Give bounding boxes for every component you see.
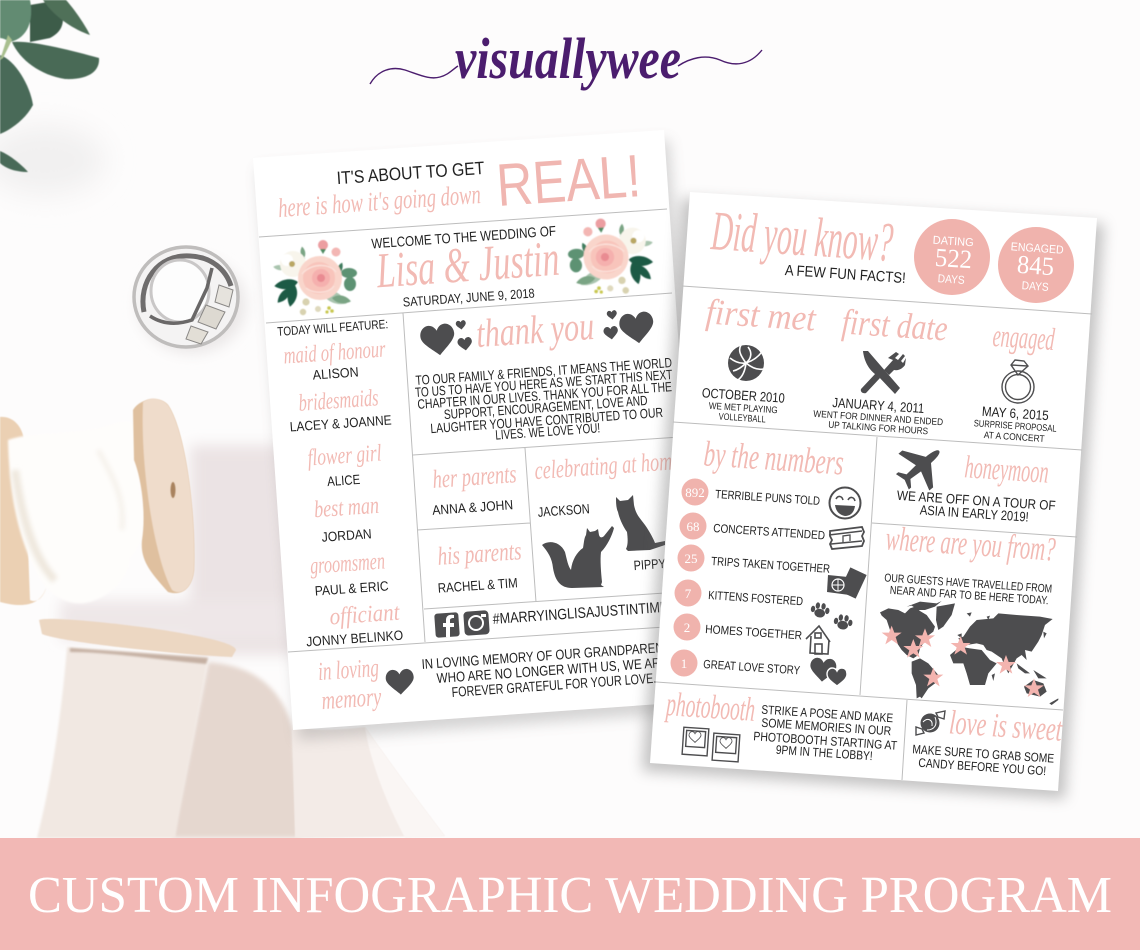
stat: engaged 845 days	[998, 227, 1074, 303]
stat: dating 522 days: DAYS	[937, 273, 965, 287]
role: flower girl: ALICE	[327, 472, 361, 489]
timeline: first met: first met	[705, 291, 818, 339]
timeline: engaged: MAY 6, 2015	[981, 404, 1049, 423]
icon: hearts right	[603, 310, 656, 346]
icon: laughing emoji	[830, 488, 860, 518]
stat: 68 concerts attended	[680, 512, 826, 542]
panel: celebrating at home: celebrating at home	[534, 446, 681, 485]
panel: in loving memory: WHO ARE NO LONGER WITH US, WE ARE	[436, 654, 669, 686]
stat: 25 trips taken together: 25	[684, 551, 698, 566]
panel: in loving memory	[317, 638, 679, 715]
icon: cat pippy	[616, 495, 665, 551]
panel: photobooth: photobooth	[664, 686, 756, 729]
stat: 892 terrible puns told: TERRIBLE PUNS TOLD	[715, 487, 821, 508]
role: bridesmaids: bridesmaids	[298, 385, 379, 417]
stat: 1 great love story: GREAT LOVE STORY	[703, 657, 801, 677]
stat: 68 concerts attended: 68	[686, 519, 700, 534]
stat: 2 homes together	[674, 614, 803, 642]
icon: cat jackson	[542, 526, 614, 588]
icon: memorial heart	[385, 668, 415, 696]
role: best man: best man	[313, 493, 380, 523]
stat: 892 terrible puns told: 892	[685, 485, 705, 500]
timeline: engaged: AT A CONCERT	[983, 430, 1045, 445]
panel: her parents	[431, 459, 517, 518]
icon: airplane	[887, 433, 955, 500]
heading: it's about to get real: IT'S ABOUT TO GET	[336, 158, 485, 188]
stat: 68 concerts attended: CONCERTS ATTENDED	[713, 521, 826, 542]
stat: 7 kittens fostered: KITTENS FOSTERED	[708, 588, 804, 608]
timeline: first date	[813, 302, 949, 437]
heading: it's about to get real: REAL!	[494, 142, 643, 219]
stat: 2 homes together: HOMES TOGETHER	[705, 622, 803, 642]
role: maid of honour: ALISON	[312, 364, 359, 383]
white fabric	[8, 421, 143, 603]
logo: visuallywee	[370, 26, 762, 91]
panel: love is sweet: love is sweet	[948, 704, 1064, 749]
heading: it's about to get real: here is how it's going down	[277, 179, 482, 223]
role: maid of honour	[283, 336, 387, 383]
panel: honeymoon: ASIA IN EARLY 2019!	[919, 502, 1029, 525]
stat: dating 522 days	[914, 219, 990, 295]
right spool disc	[133, 399, 194, 593]
timeline: first met: VOLLEYBALL	[718, 411, 766, 426]
welcome block	[371, 223, 561, 310]
stat: 7 kittens fostered: 7	[685, 586, 692, 601]
role: bridesmaids: LACEY & JOANNE	[289, 412, 392, 435]
left spool disc	[0, 417, 46, 605]
panel: his parents	[436, 536, 522, 596]
stat: engaged 845 days: 845	[1016, 250, 1055, 281]
icon: facebook	[434, 612, 460, 638]
panel: where are you from: NEAR AND FAR TO BE HERE TODAY.	[889, 585, 1049, 607]
panel: honeymoon	[887, 433, 1056, 525]
timeline: engaged	[973, 317, 1057, 445]
thank you message: TO OUR FAMILY & FRIENDS, IT MEANS THE WORLD	[415, 355, 673, 388]
welcome block: Lisa & Justin	[374, 230, 561, 298]
stat: 1 great love story	[670, 650, 801, 677]
role: maid of honour: maid of honour	[283, 336, 387, 370]
second spool	[37, 619, 236, 838]
role: bridesmaids	[289, 385, 392, 435]
stat: 25 trips taken together	[678, 544, 831, 576]
icon: left floral bouquet	[273, 240, 357, 315]
stat: 2 homes together: 2	[684, 620, 690, 635]
thank you message: LAUGHTER YOU HAVE CONTRIBUTED TO OUR	[430, 405, 664, 436]
stat: engaged 845 days: ENGAGED	[1010, 241, 1064, 257]
icon: concert tickets	[829, 527, 864, 549]
timeline: engaged: engaged	[992, 317, 1056, 357]
panel: love is sweet: MAKE SURE TO GRAB SOME	[912, 742, 1055, 766]
soft background shadows	[0, 125, 300, 655]
icon: right floral bouquet	[566, 215, 656, 297]
timeline: first met: WE MET PLAYING	[708, 401, 778, 416]
panel: in loving memory: in loving	[317, 653, 380, 686]
panel: left program sheet	[253, 130, 708, 740]
panel: where are you from	[880, 520, 1058, 705]
panel: photobooth: STRIKE A POSE AND MAKE	[761, 703, 894, 725]
role: groomsmen: groomsmen	[309, 548, 386, 580]
panel: photobooth: SOME MEMORIES IN OUR	[761, 716, 892, 738]
eucalyptus leaves	[0, 0, 99, 172]
icon: hearts left	[419, 320, 473, 358]
panel: photobooth: PHOTOBOOTH STARTING AT	[753, 729, 898, 753]
role: officiant: officiant	[329, 600, 401, 630]
panel: his parents: RACHEL & TIM	[437, 575, 518, 596]
world map with guest stars	[880, 601, 1058, 705]
banner	[0, 838, 1140, 950]
panel: by the numbers: by the numbers	[703, 433, 845, 483]
thank you message: SUPPORT, ENCOURAGEMENT, LOVE AND	[443, 393, 648, 422]
panel: her parents: her parents	[431, 459, 517, 494]
icon: wedding rings	[134, 247, 246, 353]
panel: thank you: thank you	[475, 303, 595, 356]
icon: passport	[827, 567, 867, 599]
logo: visuallywee: visuallywee	[455, 26, 681, 91]
panel: honeymoon: WE ARE OFF ON A TOUR OF	[896, 488, 1056, 513]
thank you message	[414, 355, 673, 443]
panel: by the numbers	[670, 433, 867, 686]
stat: 1 great love story: 1	[681, 656, 687, 671]
stat: 892 terrible puns told	[682, 478, 821, 508]
panel: today will feature: TODAY WILL FEATURE:	[277, 317, 389, 339]
timeline: first met: OCTOBER 2010	[701, 385, 785, 406]
panel: in loving memory: memory	[320, 682, 383, 715]
panel: love is sweet	[912, 704, 1064, 778]
icon: house	[806, 626, 830, 654]
stat: dating 522 days: DATING	[932, 235, 974, 249]
panel: thank you	[414, 303, 673, 443]
icon: paw prints	[810, 601, 853, 631]
icon: knife and fork	[861, 351, 906, 394]
timeline: engaged: SURPRISE PROPOSAL	[973, 418, 1057, 435]
stat: engaged 845 days: DAYS	[1021, 280, 1049, 294]
icon: volleyball	[728, 345, 764, 381]
heading: did you know: Did you know?	[709, 200, 895, 274]
panel: photobooth: 9PM IN THE LOBBY!	[775, 743, 873, 763]
panel: honeymoon: honeymoon	[964, 448, 1050, 490]
panel: where are you from: OUR GUESTS HAVE TRAVELLED FROM	[884, 572, 1052, 596]
timeline: first date: JANUARY 4, 2011	[832, 395, 925, 416]
panel: right fun facts sheet	[642, 192, 1104, 799]
role: flower girl	[307, 440, 383, 489]
icon: diamond ring	[1002, 360, 1034, 403]
thank you message: LIVES. WE LOVE YOU!	[495, 420, 601, 443]
welcome block: WELCOME TO THE WEDDING OF	[371, 223, 556, 251]
panel: today will feature	[277, 317, 404, 649]
thank you message: TO US TO HAVE YOU HERE AS WE START THIS NEXT	[414, 367, 673, 400]
stat: dating 522 days: 522	[934, 243, 973, 274]
thank you message: CHAPTER IN OUR LIVES. THANK YOU FOR ALL THE	[417, 379, 672, 412]
heading: did you know: A FEW FUN FACTS!	[784, 262, 906, 287]
panel: in loving memory: IN LOVING MEMORY OF OUR GRANDPARENTS	[421, 638, 679, 672]
welcome block: SATURDAY, JUNE 9, 2018	[402, 285, 535, 310]
stat: 25 trips taken together: TRIPS TAKEN TOGETHER	[711, 554, 831, 576]
wooden spool with white fabric	[0, 398, 194, 605]
role: flower girl: flower girl	[307, 440, 383, 472]
heading: it's about to get real	[277, 142, 643, 223]
stat: 7 kittens fostered	[674, 580, 804, 608]
role: best man: JORDAN	[321, 526, 372, 545]
panel: celebrating at home: PIPPY	[633, 556, 666, 573]
panel: photobooth	[664, 686, 898, 763]
icon: candy	[916, 711, 945, 735]
icon: instagram	[463, 610, 490, 636]
panel: her parents: ANNA & JOHN	[432, 497, 514, 518]
panel: celebrating at home: JACKSON	[537, 501, 590, 520]
heading: did you know	[709, 200, 906, 287]
panel: in loving memory: FOREVER GRATEFUL FOR YOUR LOVE.	[451, 670, 657, 700]
fabric ribbon drape	[172, 662, 445, 838]
panel: love is sweet: CANDY BEFORE YOU GO!	[918, 756, 1047, 778]
role: groomsmen: PAUL & ERIC	[314, 578, 389, 599]
panel: social hashtag: #MARRYINGLISAJUSTINTIME	[492, 599, 669, 628]
role: groomsmen	[309, 548, 389, 599]
photo props: fabric, spools, ring, eucalyptus	[0, 0, 445, 838]
panel: social hashtag	[434, 599, 669, 638]
role: officiant: JONNY BELINKO	[306, 628, 404, 649]
role: officiant	[306, 600, 404, 649]
timeline: first met	[701, 291, 818, 426]
icon: polaroids	[682, 727, 740, 762]
panel: his parents: his parents	[436, 536, 522, 571]
role: best man	[313, 493, 380, 545]
banner: CUSTOM INFOGRAPHIC WEDDING PROGRAM	[28, 867, 1112, 924]
panel: celebrating at home	[534, 446, 681, 588]
timeline: first date: first date	[841, 302, 949, 348]
timeline: first date: UP TALKING FOR HOURS	[828, 420, 928, 437]
icon: two hearts	[809, 657, 847, 686]
timeline: first date: WENT FOR DINNER AND ENDED	[813, 409, 943, 428]
